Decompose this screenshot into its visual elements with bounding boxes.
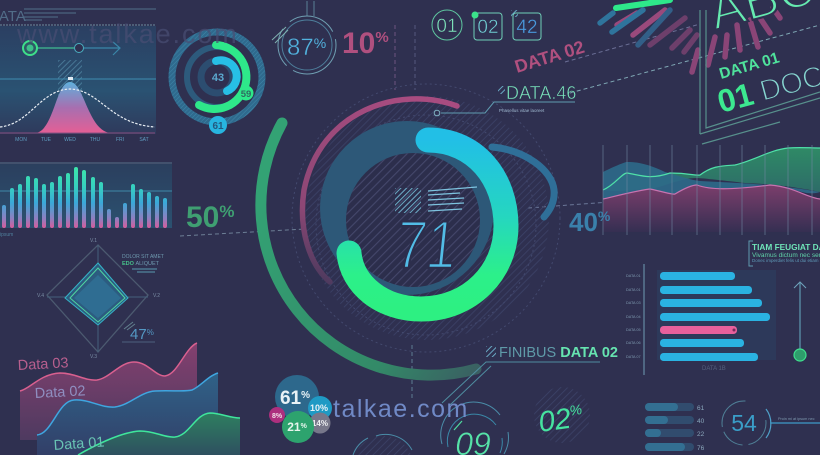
- label: DATA 02: DATA 02: [512, 37, 587, 77]
- hatch column: [58, 60, 82, 100]
- label: 10%: %: [375, 29, 389, 46]
- panel: radial burst and ABC document: [600, 0, 820, 144]
- gauge: 87%: %: [314, 35, 326, 51]
- progress node: [37, 47, 74, 49]
- axis caption: DATA 1B: [702, 366, 726, 372]
- row labels: DATA 04: [626, 315, 641, 319]
- main gradient ring: [349, 140, 506, 309]
- weekday labels: THU: [90, 137, 101, 143]
- badge 61: [209, 116, 227, 134]
- blue arc: [216, 60, 237, 91]
- outer diamond: [47, 245, 148, 352]
- gauge: 54: [722, 401, 820, 445]
- value 47%: 47: [130, 326, 147, 343]
- gauge: 02%: %: [568, 401, 583, 419]
- gauge: 02%: [534, 387, 590, 443]
- hatched gauge bottom: [353, 434, 412, 455]
- axis labels: [37, 238, 160, 360]
- caption: ipsum: [0, 232, 13, 238]
- series labels: Data 03: [17, 355, 69, 374]
- label: 40%: 40: [569, 207, 598, 237]
- blue area: [37, 373, 218, 455]
- blue side arc: [492, 147, 554, 217]
- backdrop: [657, 270, 776, 360]
- panel: top-left bell curve: [0, 8, 156, 143]
- inner ring: [201, 61, 233, 93]
- central value 71: 71: [392, 207, 461, 283]
- row labels: DATA 06: [626, 341, 641, 345]
- document frame: [700, 10, 820, 144]
- mini progress bars: 61: [697, 405, 705, 412]
- area chart: Data 01-03: [17, 343, 240, 455]
- callout: DATA.46: Phasellus vitae laoreet: [499, 108, 545, 113]
- gauge: 02%: 02: [537, 403, 573, 439]
- horizontal reference: [0, 78, 156, 80]
- bubble 14: [310, 412, 330, 434]
- radar chart: [37, 238, 164, 360]
- bubbles: [269, 375, 332, 443]
- callout: FINIBUS DATA 02: [442, 345, 618, 405]
- big 01: 01: [713, 76, 757, 120]
- steel blue inner ring: [320, 121, 494, 295]
- row labels: DATA 01: [626, 288, 641, 292]
- data diamonds: [65, 263, 128, 325]
- blue dotted area: [603, 162, 820, 199]
- mini progress bars: 22: [697, 431, 705, 438]
- bubbles: 61: [280, 388, 301, 409]
- bars: [660, 272, 735, 280]
- axis: [0, 132, 155, 134]
- area chart: top right: [603, 145, 820, 235]
- inner hatched disc: [346, 153, 480, 287]
- chip 01: 01: [436, 16, 458, 37]
- pink line: [20, 343, 197, 391]
- text lines icon: [428, 187, 477, 211]
- arrow indicator: [794, 282, 806, 361]
- gauge: 54: Proin mi at ipsum nec: [778, 417, 815, 421]
- ring chart: 43 59 61: 59: [241, 89, 251, 100]
- axes: [47, 245, 148, 352]
- ring chart: 43 59 61: [172, 32, 262, 134]
- dashed orbit rings: [292, 84, 560, 352]
- bubbles: 14%: [312, 419, 328, 428]
- row labels: DATA 07: [626, 355, 641, 359]
- callout: TIAM FEUGIAT: [749, 241, 820, 266]
- bell area: [36, 82, 110, 133]
- value 47%: %: [147, 328, 154, 337]
- green arc: [199, 45, 246, 109]
- green burst bar: [616, 0, 670, 8]
- mini progress bars: 40: [697, 418, 705, 425]
- area chart: Data 01-03: Data 01: [53, 434, 105, 454]
- panel: central gauge: [261, 84, 560, 375]
- blue line: [37, 373, 218, 435]
- radar chart: EDO ALIQUET: [122, 261, 160, 267]
- axis labels: V.4: [37, 293, 44, 299]
- chart panel: [0, 26, 156, 134]
- area chart: Data 01-03: Data 02: [34, 383, 86, 402]
- label: 50%: %: [219, 202, 234, 221]
- outer hatched ring: [172, 32, 262, 122]
- radar legend: DOLOR SIT AMET: [122, 254, 164, 260]
- gauge: 87%: 87: [287, 34, 314, 61]
- hatched central disc: [305, 96, 549, 340]
- row labels: DATA 05: [626, 328, 641, 332]
- vertical gridlines: [603, 145, 812, 235]
- bubble 21: [282, 411, 314, 443]
- callout: FINIBUS DATA 02: FINIBUS DATA 02: [499, 345, 618, 361]
- label: DATA 01: DATA 01: [717, 49, 782, 83]
- green line: [603, 148, 820, 190]
- label: 40%: %: [598, 208, 611, 224]
- row labels: DATA 01: [626, 274, 641, 278]
- mini progress bars: 76: [697, 445, 705, 452]
- pink area: [20, 343, 197, 440]
- axis labels: V.2: [153, 293, 160, 299]
- gauge: 87%: [272, 1, 336, 74]
- watermark: talkae.com: talkae.com: [333, 395, 469, 423]
- dashed guide lines: [180, 24, 820, 400]
- green area: [603, 148, 820, 192]
- chip 42: 42: [516, 17, 538, 38]
- value 43: 43: [212, 72, 224, 84]
- big green arc: [261, 123, 476, 375]
- bubbles: %: [301, 423, 308, 430]
- ring chart: 43 59 61: 61: [212, 121, 224, 132]
- bubble 8: [269, 407, 285, 423]
- axis: [643, 264, 645, 375]
- weekday labels: FRI: [116, 137, 124, 143]
- panel: horizontal bars: [626, 264, 776, 375]
- pink area: [603, 185, 820, 232]
- bubble 61: [275, 375, 319, 419]
- bubble 10: [308, 396, 332, 420]
- axis labels: V.3: [90, 354, 97, 360]
- chart panel: [0, 164, 172, 228]
- pink line: [603, 185, 820, 199]
- heading lines: [24, 9, 156, 20]
- weekday labels: SAT: [139, 137, 149, 143]
- bubbles: 10%: [310, 403, 328, 413]
- radial burst strokes: [600, 8, 780, 72]
- callout: DATA.46: DATA.46: [506, 83, 576, 103]
- row labels: [626, 274, 641, 359]
- row labels: DATA 03: [626, 301, 641, 305]
- callout: TIAM FEUGIAT: Donec imperdiet felis ut dui etiam: [752, 258, 819, 263]
- callout: DATA.46: [434, 83, 576, 116]
- axis labels: V.1: [90, 238, 97, 244]
- gauge: 09: [441, 402, 508, 455]
- bars: [2, 167, 167, 228]
- bell outline dashed: [0, 89, 155, 127]
- weekday labels: MON: [15, 137, 27, 143]
- bar chart: [0, 163, 172, 238]
- green line: [78, 413, 240, 455]
- gauge: 54: 54: [731, 410, 757, 436]
- bubbles: 8%: [272, 413, 283, 420]
- green area: [78, 413, 240, 455]
- pink arc: [302, 99, 457, 282]
- mini progress bars: [645, 403, 705, 452]
- chip 02: 02: [477, 17, 499, 38]
- weekday labels: TUE: [41, 137, 52, 143]
- number chips: [432, 10, 541, 40]
- peak marker: [68, 77, 73, 80]
- bubbles: 21: [287, 420, 301, 434]
- middle ring: [187, 47, 247, 107]
- label: 10%: 10: [342, 27, 375, 60]
- weekday labels: [15, 137, 149, 143]
- weekday labels: WED: [64, 137, 76, 143]
- label: 50%: 50: [186, 201, 219, 234]
- watermark: www.talkae.com: www.talkae.com: [16, 19, 239, 49]
- icon: hatched square: [395, 188, 421, 213]
- badge 59: [238, 86, 254, 100]
- bubbles: %: [301, 390, 310, 401]
